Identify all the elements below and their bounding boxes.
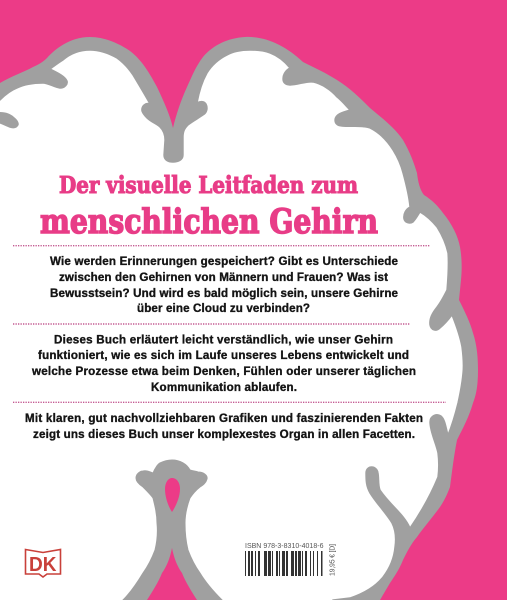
text block 1: Bewusstsein? Und wird es bald möglich sein, unsere Gehirne [50, 287, 399, 300]
text block 1 [50, 255, 399, 315]
DK logo: DK [29, 554, 57, 576]
dotted divider 3 [13, 401, 446, 403]
text block 3: Mit klaren, gut nachvollziehbaren Grafiken und faszinierenden Fakten [25, 412, 423, 425]
heading [40, 172, 378, 242]
dotted divider 1 [13, 245, 430, 247]
barcode [245, 551, 322, 576]
barcode block [245, 543, 336, 576]
text block 2: welche Prozesse etwa beim Denken, Fühlen oder unserer täglichen [31, 365, 416, 378]
pink teardrop [165, 478, 180, 512]
text block 3 [25, 412, 423, 441]
text block 2: Kommunikation ablaufen. [151, 381, 297, 394]
text block 1: Wie werden Erinnerungen gespeichert? Gibt es Unterschiede [50, 255, 399, 268]
price text: 19,95 € [D] [330, 544, 336, 576]
text block 3: zeigt uns dieses Buch unser komplexestes Organ in allen Facetten. [33, 428, 415, 441]
heading line 2: menschlichen Gehirn [40, 202, 378, 242]
dotted divider 2 [13, 323, 410, 325]
brain stem shape [123, 460, 222, 600]
heading line 1: Der visuelle Leitfaden zum [59, 172, 358, 199]
ISBN text: ISBN 978-3-8310-4018-6 [245, 543, 324, 550]
pink bottom notch [147, 548, 197, 600]
text block 2: funktioniert, wie es sich im Laufe unseres Lebens entwickelt und [38, 349, 409, 362]
DK logo [26, 550, 60, 577]
brain fold: upper left edge [0, 112, 19, 128]
text block 1: zwischen den Gehirnen von Männern und Frauen? Was ist [59, 271, 388, 284]
text block 2: Dieses Buch erläutert leicht verständlich, wie unser Gehirn [54, 334, 393, 346]
text block 2 [31, 334, 416, 394]
text block 1: über eine Cloud zu verbinden? [137, 302, 310, 315]
